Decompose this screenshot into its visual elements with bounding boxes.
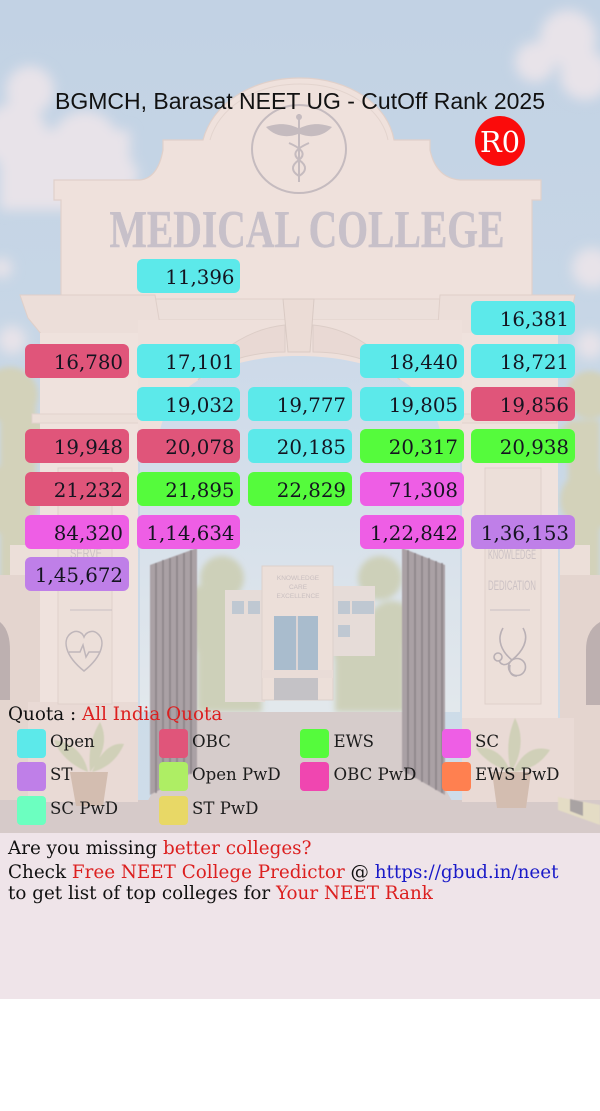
inner arch bbox=[138, 320, 462, 430]
planters bbox=[70, 772, 531, 808]
legend: EWS bbox=[334, 732, 374, 751]
pillar inscriptions bbox=[70, 545, 536, 593]
pillar inscriptions: SERVE bbox=[70, 545, 102, 561]
cutoff rank grid: 1,14,634 bbox=[146, 522, 234, 545]
stethoscope pictogram bbox=[494, 628, 526, 676]
cutoff rank grid: 1,36,153 bbox=[481, 522, 569, 545]
cutoff rank grid: 18,721 bbox=[500, 351, 569, 374]
title: BGMCH, Barasat NEET UG - CutOff Rank 2025 bbox=[55, 88, 545, 114]
round badge: R0 bbox=[475, 116, 525, 166]
background illustration: medical college gate: KNOWLEDGE bbox=[277, 575, 320, 582]
cutoff rank grid: 16,780 bbox=[54, 351, 123, 374]
cutoff rank grid: 22,829 bbox=[277, 479, 346, 502]
cutoff rank grid: 21,232 bbox=[54, 479, 123, 502]
left pier bbox=[40, 333, 138, 718]
distant trees bbox=[182, 556, 416, 712]
cutoff rank grid: 20,938 bbox=[500, 436, 569, 459]
legend: Open PwD bbox=[192, 765, 281, 784]
legend: OBC PwD bbox=[334, 765, 416, 784]
quota line: Quota : All India Quota bbox=[8, 704, 222, 725]
cutoff rank grid: 71,308 bbox=[389, 479, 458, 502]
distant hospital bbox=[225, 590, 265, 702]
side trees bbox=[0, 367, 600, 600]
cutoff rank grid: 19,856 bbox=[500, 394, 569, 417]
cutoff rank grid bbox=[25, 259, 575, 591]
cutoff rank grid: 20,185 bbox=[277, 436, 346, 459]
cutoff rank grid: 19,032 bbox=[165, 394, 234, 417]
cutoff rank grid: 20,317 bbox=[389, 436, 458, 459]
cutoff rank grid: 16,381 bbox=[500, 308, 569, 331]
legend bbox=[17, 729, 559, 825]
cutoff rank grid: 17,101 bbox=[165, 351, 234, 374]
legend: OBC bbox=[192, 732, 231, 751]
pediment and upper wall bbox=[54, 78, 541, 300]
side walls bbox=[0, 575, 40, 800]
bottom panel bbox=[0, 833, 600, 999]
legend: SC bbox=[475, 732, 499, 751]
legend: Open bbox=[50, 732, 95, 751]
cutoff rank grid: 19,948 bbox=[54, 436, 123, 459]
pillar inscriptions: DEDICATION bbox=[488, 577, 536, 593]
medallion with caduceus bbox=[252, 105, 346, 193]
cutoff rank grid: 84,320 bbox=[54, 522, 123, 545]
cutoff rank grid: 20,078 bbox=[165, 436, 234, 459]
right pier bbox=[462, 333, 558, 718]
kerb stones bbox=[558, 797, 600, 825]
pillar inscriptions: KNOWLEDGE bbox=[488, 546, 536, 562]
iron gates bbox=[150, 548, 445, 795]
gate opening bbox=[140, 340, 460, 712]
round badge: R0: R0 bbox=[480, 125, 520, 159]
background illustration: medical college gate: CARE bbox=[289, 584, 308, 591]
legend: ST bbox=[50, 765, 72, 784]
cutoff rank grid: 11,396 bbox=[165, 266, 234, 289]
legend: EWS PwD bbox=[475, 765, 559, 784]
background illustration: medical college gate: EXCELLENCE bbox=[276, 593, 320, 600]
legend: ST PwD bbox=[192, 799, 258, 818]
cutoff rank grid: 19,805 bbox=[389, 394, 458, 417]
cutoff rank grid: 1,22,842 bbox=[370, 522, 458, 545]
cutoff rank grid: 21,895 bbox=[165, 479, 234, 502]
promo line: your rank: to get list of top colleges for Your NEET Rank bbox=[8, 883, 433, 904]
cutoff rank grid: 1,45,672 bbox=[35, 564, 123, 587]
promo line: predictor link: Check Free NEET College Predictor @ https://gbud.in/neet bbox=[8, 862, 558, 883]
path bbox=[130, 712, 470, 833]
legend: SC PwD bbox=[50, 799, 118, 818]
cutoff rank grid: 19,777 bbox=[277, 394, 346, 417]
promo line: better colleges: Are you missing better colleges? bbox=[8, 838, 311, 859]
heart pictogram bbox=[66, 631, 102, 671]
upper cornice and pier capitals bbox=[155, 299, 445, 320]
cutoff rank grid: 18,440 bbox=[389, 351, 458, 374]
